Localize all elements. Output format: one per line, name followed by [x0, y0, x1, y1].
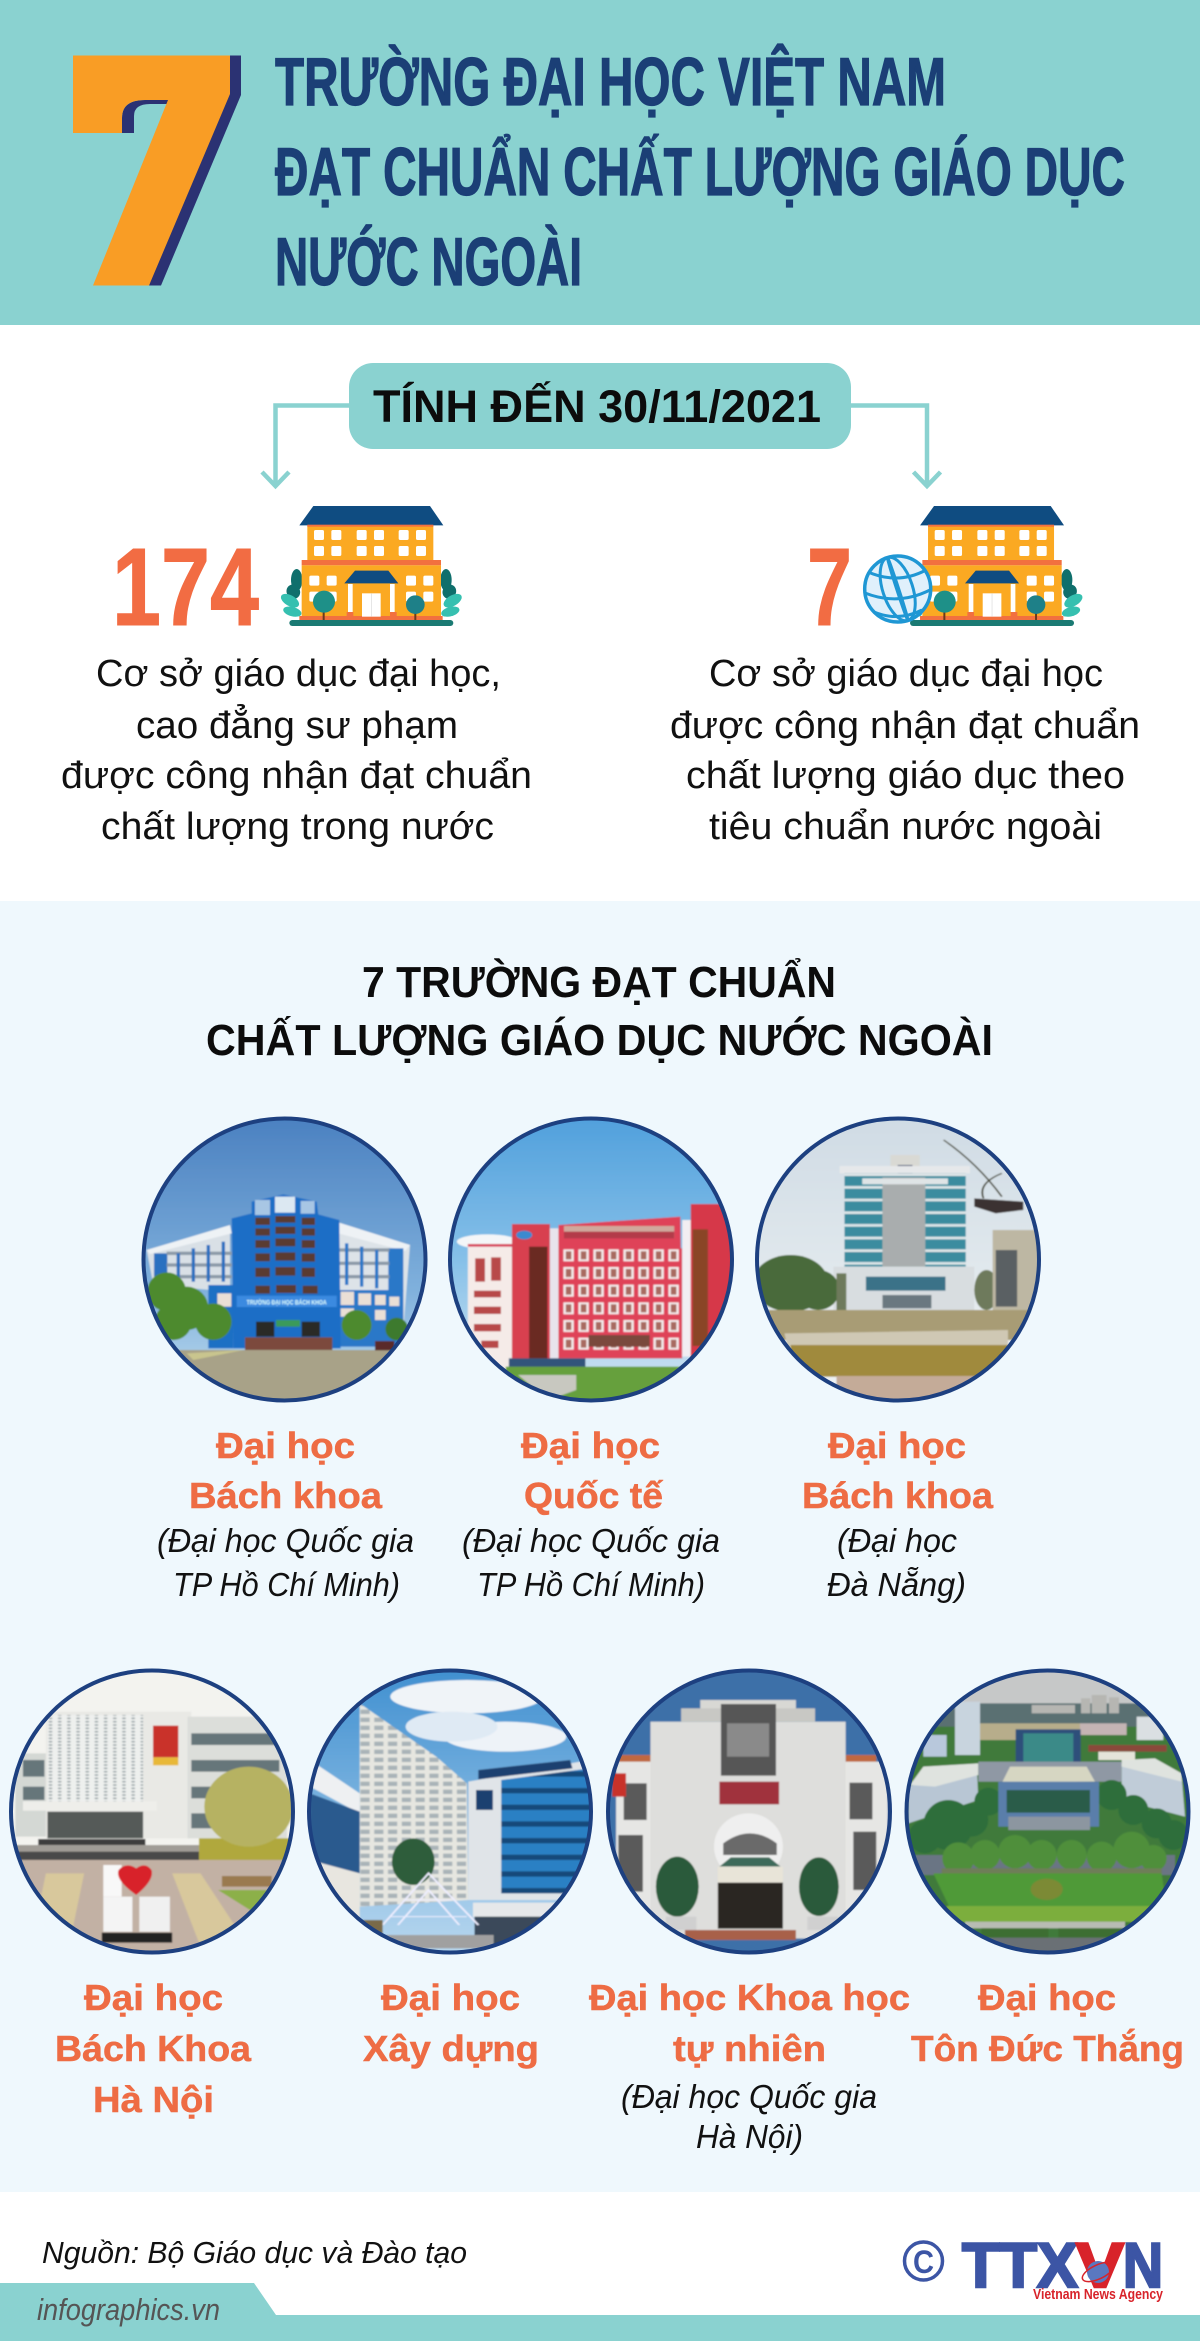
title: [275, 43, 1125, 300]
photo: Ton Duc Thang: [902, 1667, 1195, 1961]
date pill: [349, 363, 851, 449]
photo: Xay dung: [302, 1667, 601, 1957]
website: infographics.vn: [37, 2292, 220, 2327]
photo: Quoc te HCM: [445, 1113, 739, 1407]
label: Bach Khoa Ha Noi: Bách Khoa: [55, 2028, 252, 2069]
arrow: right: [851, 406, 940, 486]
right description: Cơ sở giáo dục đại học: [709, 653, 1103, 695]
label: Bach khoa Da Nang: [802, 1425, 994, 1603]
label: Khoa hoc tu nhien: Đại học Khoa học: [589, 1977, 910, 2018]
left stat: [61, 506, 532, 848]
right stat: [670, 506, 1140, 848]
icon: school building: [279, 506, 464, 626]
number 7: 7: [807, 526, 852, 649]
icon: copyright: [904, 2242, 942, 2280]
label: Bach khoa Da Nang: (Đại học: [837, 1522, 957, 1559]
label: Quoc te HCM: Quốc tế: [524, 1475, 664, 1516]
label: Bach Khoa Ha Noi: Hà Nội: [93, 2079, 214, 2120]
footer: [0, 2231, 1200, 2341]
left description: chất lượng trong nước: [101, 806, 494, 848]
right description: được công nhận đạt chuẩn: [670, 705, 1140, 747]
label: Ton Duc Thang: Tôn Đức Thắng: [911, 2027, 1184, 2069]
photo: Khoa hoc tu nhien: [601, 1667, 899, 1957]
left description: được công nhận đạt chuẩn: [61, 755, 532, 797]
section heading: 7 TRƯỜNG ĐẠT CHUẨN: [362, 956, 836, 1007]
logo: TTXVN: [962, 2231, 1164, 2303]
logo: TTXVN: Vietnam News Agency: [1033, 2286, 1164, 2303]
label: Bach Khoa Ha Noi: [55, 1977, 252, 2120]
logo: TTXVN: TTX: [962, 2231, 1078, 2301]
label: Bach khoa Da Nang: Đại học: [828, 1425, 966, 1466]
photo: Bach Khoa Ha Noi: [8, 1667, 298, 1957]
label: Xay dung: Đại học: [381, 1977, 520, 2018]
label: Bach khoa Da Nang: Bách khoa: [802, 1475, 994, 1516]
date text: TÍNH ĐẾN 30/11/2021: [373, 381, 821, 432]
right description: tiêu chuẩn nước ngoài: [709, 806, 1102, 848]
icon: globe: [865, 553, 931, 625]
right description: [670, 653, 1140, 848]
label: Ton Duc Thang: Đại học: [978, 1977, 1116, 2018]
label: Bach khoa Da Nang: Đà Nẵng): [827, 1566, 966, 1603]
label: Ton Duc Thang: [911, 1977, 1184, 2069]
left description: Cơ sở giáo dục đại học,: [96, 653, 501, 695]
label: Khoa hoc tu nhien: Hà Nội): [696, 2118, 803, 2155]
label: Bach khoa HCM: TP Hồ Chí Minh): [173, 1566, 400, 1603]
section heading: CHẤT LƯỢNG GIÁO DỤC NƯỚC NGOÀI: [206, 1015, 993, 1065]
label: Khoa hoc tu nhien: tự nhiên: [673, 2028, 826, 2069]
label: Quoc te HCM: [462, 1425, 720, 1603]
photo: Bach khoa HCM: [140, 1115, 430, 1407]
header band: [0, 0, 1200, 325]
footer band: [0, 2283, 1200, 2341]
label: Bach Khoa Ha Noi: Đại học: [84, 1977, 223, 2018]
label: Bach khoa HCM: Bách khoa: [189, 1475, 383, 1516]
label: Quoc te HCM: (Đại học Quốc gia: [462, 1522, 720, 1559]
label: Bach khoa HCM: Đại học: [216, 1425, 355, 1466]
label: Khoa hoc tu nhien: (Đại học Quốc gia: [621, 2078, 877, 2115]
photo: Bach khoa Da Nang: [751, 1113, 1045, 1407]
section heading: [206, 956, 993, 1065]
date pill with arrows: [262, 363, 940, 486]
logo: TTXVN: N: [1123, 2231, 1163, 2301]
title: NƯỚC NGOÀI: [275, 224, 582, 300]
big number 7 icon: [73, 56, 241, 286]
label: Xay dung: [363, 1977, 539, 2069]
icon: copyright: C: [913, 2244, 934, 2280]
left description: cao đẳng sư phạm: [136, 703, 458, 747]
logo: TTXVN: V: [1076, 2231, 1124, 2301]
number 174: 174: [112, 526, 259, 649]
panel: seven universities: [0, 901, 1200, 2192]
label: Quoc te HCM: Đại học: [521, 1425, 660, 1466]
label: Khoa hoc tu nhien: [589, 1977, 910, 2155]
source: Nguồn: Bộ Giáo dục và Đào tạo: [42, 2235, 467, 2270]
label: Xay dung: Xây dựng: [363, 2028, 539, 2069]
icon: school building: [899, 506, 1085, 626]
label: Quoc te HCM: TP Hồ Chí Minh): [477, 1566, 705, 1603]
label: Bach khoa HCM: (Đại học Quốc gia: [157, 1522, 414, 1559]
left description: [61, 653, 532, 848]
arrow: left: [262, 406, 349, 486]
photo: Bach khoa HCM: TRƯỜNG ĐẠI HỌC BÁCH KHOA: [247, 1297, 327, 1306]
right description: chất lượng giáo dục theo: [686, 755, 1125, 797]
label: Bach khoa HCM: [157, 1425, 414, 1603]
